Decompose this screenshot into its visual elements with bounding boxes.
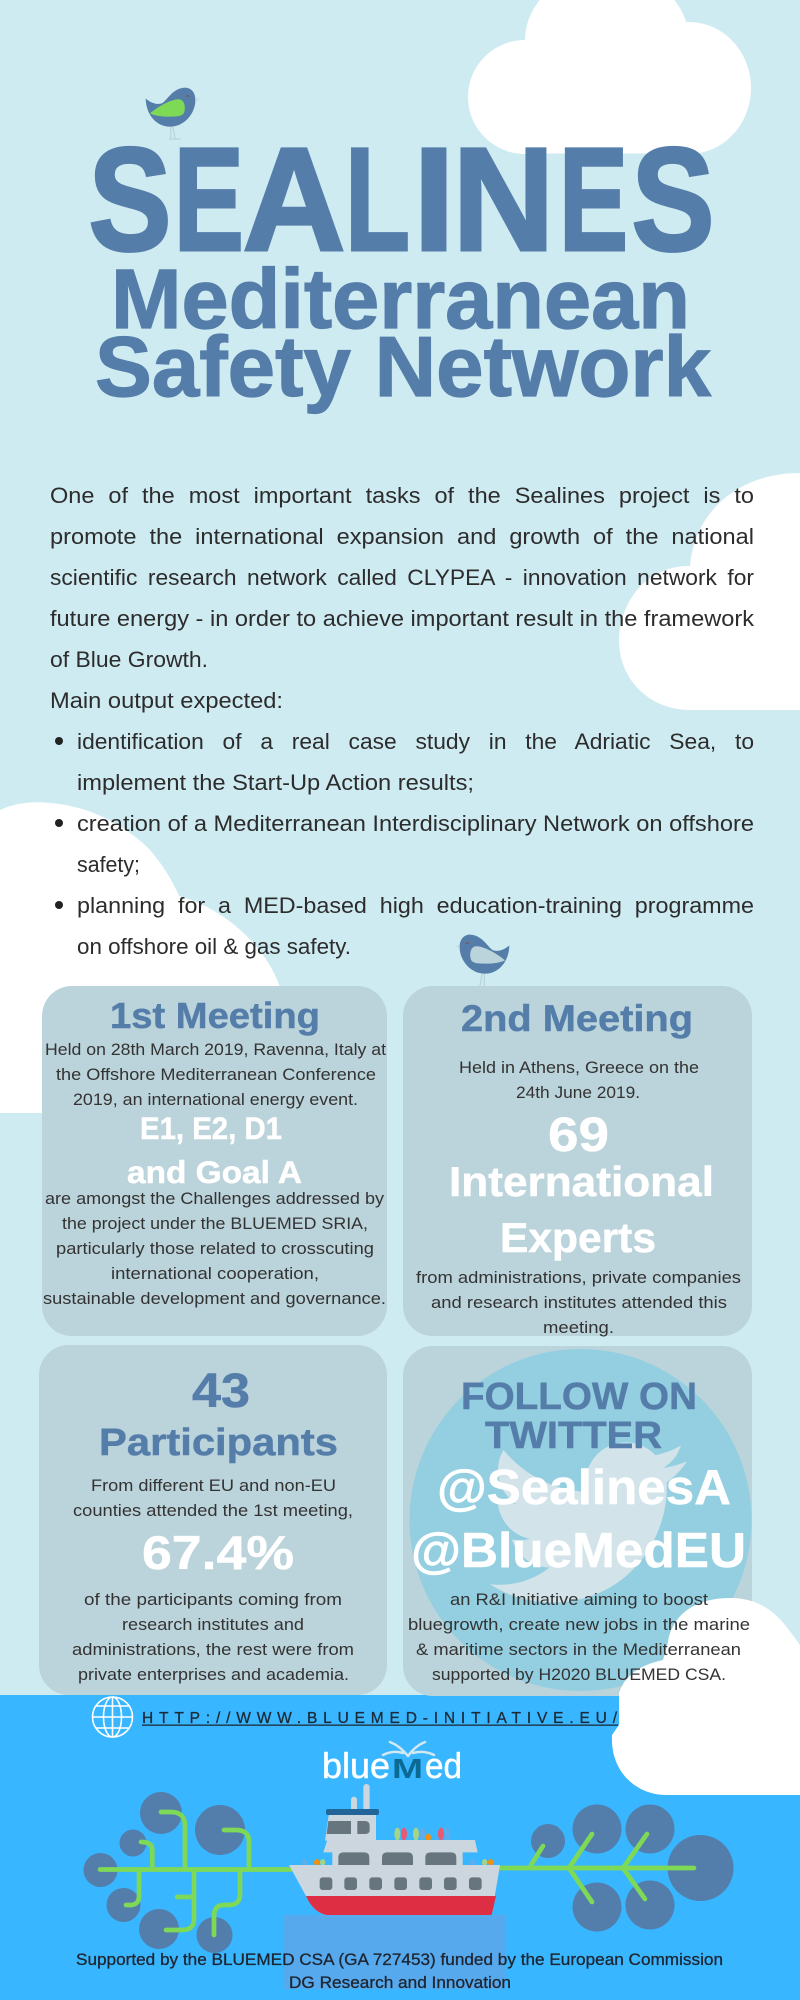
text: origin of participants: counties attended the 1st meeting,	[73, 1502, 353, 1520]
heading: 1st Meeting: 1st Meeting	[110, 995, 320, 1036]
text: challenges details: the project under the BLUEMED SRIA,	[62, 1215, 368, 1233]
cloud: top right	[468, 0, 751, 154]
icon: bird with pale wing	[456, 935, 509, 986]
title: SEALINES: S	[632, 118, 714, 282]
text: origin of participants: From different EU and non-EU	[91, 1477, 336, 1495]
text: meeting details: 2019, an international energy event.	[73, 1091, 358, 1109]
footer credits: Supported by the BLUEMED CSA (GA 727453) funded by the European Commission	[76, 1950, 723, 1969]
text: meeting details: Held on 28th March 2019, Ravenna, Italy at	[45, 1041, 386, 1059]
highlight: 67.4%: 67.4%	[142, 1526, 294, 1579]
intro text block: identification of a real case study in the Adriatic Sea, to	[77, 729, 754, 754]
text: date and place: Held in Athens, Greece on the	[459, 1059, 699, 1077]
intro text block	[50, 483, 755, 959]
intro text block: safety;	[77, 852, 140, 877]
icon: twitter bird	[490, 1442, 687, 1602]
logo: bluemed: ed	[425, 1745, 462, 1786]
panel: 43 participants	[39, 1345, 387, 1695]
highlight: challenges: and Goal A	[127, 1154, 302, 1190]
panel: 1st meeting	[42, 986, 387, 1336]
logo: bluemed: M	[392, 1753, 423, 1784]
highlight: twitter handles: @BlueMedEU	[411, 1524, 746, 1578]
text: bluemed description: an R&I Initiative aiming to boost	[450, 1591, 708, 1609]
icon: ship	[289, 1784, 500, 1915]
text: challenges details: are amongst the Challenges addressed by	[45, 1190, 385, 1208]
logo: bluemed: blue	[322, 1745, 390, 1786]
highlight: 69 international experts: 69	[548, 1109, 609, 1162]
diagram: right pipeline tree	[500, 1804, 734, 1932]
text: meeting details	[45, 1041, 386, 1109]
highlight: 69 international experts: Experts	[500, 1214, 656, 1261]
highlight: 69 international experts	[449, 1109, 714, 1261]
logo: bluemed	[322, 1742, 462, 1786]
intro text block: creation of a Mediterranean Interdisciplinary Network on offshore	[77, 811, 754, 836]
text: meeting details: the Offshore Mediterranean Conference	[56, 1066, 376, 1084]
intro text block: of Blue Growth.	[50, 647, 208, 672]
intro text block: scientific research network called CLYPEA - innovation network for	[50, 565, 754, 590]
highlight: challenges	[127, 1110, 302, 1190]
link: bluemed initiative url: HTTP://WWW.BLUEMED-INITIATIVE.EU/	[142, 1710, 618, 1727]
intro text block: One of the most important tasks of the Sealines project is to	[50, 483, 754, 508]
cloud: right middle	[619, 473, 800, 710]
text: participants breakdown: research institutes and	[122, 1616, 304, 1634]
text: date and place: 24th June 2019.	[516, 1084, 640, 1102]
diagram: left pipeline tree	[84, 1792, 291, 1953]
title: SEALINES: I	[413, 118, 455, 282]
heading: 2nd Meeting: 2nd Meeting	[461, 998, 693, 1039]
heading: follow on twitter	[461, 1376, 697, 1457]
text: challenges details	[43, 1190, 386, 1308]
panel: 2nd meeting	[403, 986, 752, 1337]
text: attendance details: and research institutes attended this	[431, 1294, 727, 1312]
text: date and place	[459, 1059, 699, 1102]
text: bluemed description: bluegrowth, create new jobs in the marine	[408, 1616, 750, 1634]
title: SEALINES: E	[174, 118, 244, 282]
title: SEALINES: N	[452, 118, 554, 282]
rectangle under ship	[283, 1915, 506, 1989]
text: challenges details: international cooperation,	[111, 1265, 319, 1283]
title	[88, 118, 714, 415]
text: challenges details: sustainable development and governance.	[43, 1290, 386, 1308]
text: origin of participants	[73, 1477, 353, 1520]
panel: twitter background	[403, 1346, 752, 1696]
heading: follow on twitter: FOLLOW ON	[461, 1376, 697, 1418]
heading: 43 Participants: Participants	[99, 1422, 338, 1464]
intro text block: on offshore oil & gas safety.	[77, 934, 351, 959]
title: Mediterranean: Mediterranean	[111, 252, 690, 346]
cloud: left middle	[0, 802, 281, 1113]
text: participants breakdown	[72, 1591, 354, 1684]
heading: 43 Participants: 43	[192, 1365, 250, 1418]
text: bluemed description: supported by H2020 BLUEMED CSA.	[432, 1666, 726, 1684]
intro text block: implement the Start-Up Action results;	[77, 770, 474, 795]
panel: twitter text	[408, 1376, 750, 1684]
text: attendance details: meeting.	[543, 1319, 614, 1337]
text: challenges details: particularly those related to crosscuting	[56, 1240, 374, 1258]
title: SEALINES: L	[345, 118, 410, 282]
icon: bird with green wing	[146, 88, 199, 139]
text: attendance details	[416, 1269, 741, 1337]
highlight: challenges: E1, E2, D1	[140, 1110, 282, 1146]
title: Safety Network: Safety Network	[95, 320, 712, 415]
intro text block: Main output expected:	[50, 688, 283, 713]
text: participants breakdown: of the participants coming from	[84, 1591, 342, 1609]
text: bluemed description: & maritime sectors in the Mediterranean	[416, 1641, 741, 1659]
text: participants breakdown: private enterprises and academia.	[78, 1666, 349, 1684]
title: SEALINES: S	[88, 118, 172, 282]
intro text block: future energy - in order to achieve important result in the framework	[50, 606, 755, 631]
intro text block: promote the international expansion and growth of the national	[50, 524, 754, 549]
highlight: 69 international experts: International	[449, 1158, 714, 1205]
blue footer band	[0, 1695, 800, 2000]
text: attendance details: from administrations, private companies	[416, 1269, 741, 1287]
highlight: twitter handles: @SealinesA	[437, 1461, 731, 1515]
cloud: bottom right	[612, 1598, 800, 1795]
heading: follow on twitter: TWITTER	[485, 1415, 662, 1457]
text: bluemed description	[408, 1591, 750, 1684]
highlight: twitter handles	[411, 1461, 746, 1578]
title: SEALINES: A	[242, 118, 346, 282]
text: participants breakdown: administrations, the rest were from	[72, 1641, 354, 1659]
footer credits	[76, 1950, 723, 1992]
icon: globe	[92, 1697, 132, 1737]
heading: 43 Participants	[99, 1365, 338, 1464]
footer credits: DG Research and Innovation	[289, 1973, 511, 1992]
title: SEALINES: E	[559, 118, 628, 282]
intro text block: planning for a MED-based high education-training programme	[77, 893, 754, 918]
